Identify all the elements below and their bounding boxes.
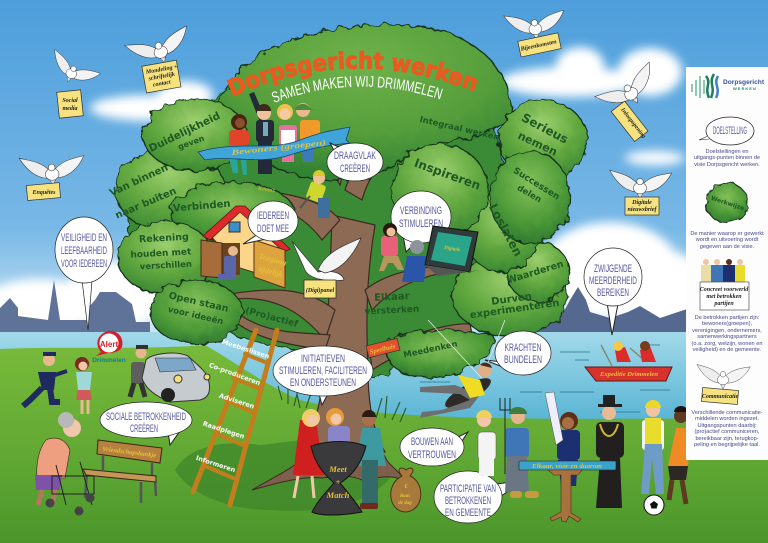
speech bubble: veiligheid: VEILIGHEID EN: [61, 232, 107, 244]
foliage: duidelijkheid: [143, 99, 247, 171]
dove: enquetes: [19, 153, 86, 200]
red boat with rowers: Expeditie Drimmelen: [599, 372, 659, 378]
foliage word labels: houden met: [130, 247, 192, 261]
logo: [692, 74, 765, 98]
mayor: [596, 395, 624, 508]
ladder labels: Raadplegen: [202, 420, 246, 441]
foliage word labels: Integraal werken: [419, 115, 500, 143]
title: Dorpsgericht werken: [226, 50, 477, 97]
foliage: meedenken: [385, 331, 493, 378]
foliage word labels: Elkaar: [374, 291, 410, 304]
kennis label on branch: Kennis: [257, 186, 276, 194]
foliage word labels: Van binnen: [108, 162, 170, 199]
foliage word labels: Verbinden: [173, 199, 231, 215]
grandmother with rollator: [35, 412, 94, 516]
meet and match funnel table: +: [336, 477, 341, 487]
foliage: rekening: [118, 222, 214, 294]
right village skyline: [535, 287, 690, 335]
speech bubble: krachten: KRACHTEN: [504, 342, 542, 354]
sign: speelhuis on branch: [366, 338, 400, 358]
speech bubble: draagvlak: DRAAGVLAK: [334, 150, 376, 162]
speech bubble: draagvlak: [327, 143, 383, 181]
stakeholders text: (o.a. zorg, welzijn, wonen en: [692, 341, 762, 347]
speech bubble: sociale: CREËREN: [130, 423, 158, 435]
speech bubble: verbinding: [391, 191, 451, 252]
dove: enquetes: Enquêtes: [31, 190, 56, 196]
foliage word labels: Loslaten: [486, 201, 525, 259]
alert sign: Drimmelen: [92, 357, 126, 364]
athlete with ball: [644, 406, 690, 515]
ladder labels: Adviseren: [218, 392, 256, 411]
woman on phone: [75, 357, 92, 414]
communicatie text: [691, 410, 763, 448]
trunk base and roots: [252, 448, 408, 490]
water ripples: [420, 345, 670, 412]
foliage: successen: [490, 151, 570, 243]
farmer: [500, 398, 539, 498]
girl on branch: [379, 223, 404, 271]
meet and match funnel table: Meet: [328, 464, 347, 474]
foliage word labels: Waarderen: [506, 259, 565, 286]
foliage word labels: Duidelijkheid: [147, 110, 222, 155]
speech bubble: initiatieven: STIMULEREN, FACILITEREN: [279, 365, 367, 377]
foliage word labels: Durven: [491, 291, 533, 308]
speech bubble: verbinding: STIMULEREN: [399, 218, 443, 230]
alert sign: [92, 331, 126, 364]
banner: bewoners (groepen): Bewoners (groepen): [230, 138, 327, 157]
foliage: open staan: [150, 280, 242, 344]
foliage: durven: [452, 256, 568, 336]
communicatie text: peling en begrijpelijke taal.: [694, 442, 760, 448]
speech bubble: bouwen: VERTROUWEN: [408, 449, 456, 461]
stakeholders text: bewoners(groepen),: [702, 321, 752, 327]
werkwijze text: [690, 231, 764, 250]
money bag: de dag: [398, 501, 412, 506]
foliage: main crown top: [212, 24, 512, 180]
dove: digitale nieuwsbrief: nieuwsbrief: [627, 207, 657, 213]
speech bubble: verbinding: VERBINDING: [400, 205, 442, 217]
dove: inloop sign: [595, 60, 665, 142]
foliage: van binnen: [115, 148, 225, 232]
foliage word labels: versterken: [364, 305, 420, 317]
communicatie text: Verschillende communicatie-: [691, 410, 763, 416]
speech bubble: participatie: BETROKKENEN: [445, 495, 491, 507]
doelstelling text: uitgangs-punten binnen de: [694, 155, 760, 161]
blue table banner: [519, 461, 616, 522]
burglar: [130, 345, 148, 397]
speech bubble: veiligheid: VOOR IEDEREEN: [61, 258, 107, 270]
woman in purple: [326, 408, 350, 446]
dove: mandeling contact: schriftelijk: [147, 72, 175, 82]
doelstelling text: [694, 149, 760, 168]
money bag: €: [404, 484, 408, 490]
woman in red: [293, 409, 324, 498]
sign: digi panel: [304, 280, 336, 298]
speech bubble: veiligheid: LEEFBAARHEID: [61, 245, 107, 257]
dove: mandeling contact: Mondeling +: [145, 64, 179, 76]
crown foliage: [115, 24, 587, 378]
foliage word labels: (Pro)actief: [244, 306, 299, 330]
werkwijze foliage icon: Werkwijze: [710, 195, 745, 212]
foliage: inspireren: [392, 144, 488, 236]
speech bubble: participatie: PARTICIPATIE VAN: [440, 483, 496, 495]
foliage: waarderen: [507, 242, 569, 302]
dove: digitale nieuwsbrief: [610, 170, 672, 215]
sign: speelhuis on branch: Speelhuis: [369, 343, 397, 356]
dove: digipanel: [292, 238, 361, 281]
red boat with rowers: [585, 341, 672, 381]
speech bubble: initiatieven: INITIATIEVEN: [301, 353, 345, 365]
tree shadow on grass: [175, 437, 395, 511]
communicatie text: (pro)actief communiceren,: [695, 429, 760, 435]
foliage: verbinden: [170, 182, 294, 242]
speech bubble: zwijgende: [584, 248, 642, 335]
speech bubble: sociale: [100, 402, 192, 445]
foliage word labels: Serieus: [519, 110, 571, 147]
speech bubble: bouwen: BOUWEN AAN: [411, 436, 453, 448]
speech bubble: draagvlak: CREËREN: [340, 163, 370, 175]
stakeholders box: [700, 282, 749, 310]
foliage word labels: verschillen: [140, 260, 192, 272]
stakeholders text: veiligheid) en de gemeente.: [693, 347, 762, 353]
werkwijze text: wordt en uitvoering wordt: [695, 237, 759, 243]
stakeholders box: met betrokken: [706, 294, 742, 300]
speech bubble: zwijgende: BEREIKEN: [597, 287, 629, 299]
speech bubble: zwijgende: MEERDERHEID: [589, 275, 637, 287]
water: [0, 332, 690, 432]
speech bubble: sociale: SOCIALE BETROKKENHEID: [106, 411, 186, 423]
werkwijze text: gegeven aan de visie.: [700, 244, 755, 250]
tree trunk and branches: [222, 130, 472, 452]
dove: social media: Social: [62, 98, 78, 104]
foliage: loslaten: [464, 192, 540, 272]
man with laptop: [402, 226, 480, 282]
ladder labels: Co-produceren: [208, 361, 262, 387]
foliage word labels: experimenteren: [469, 298, 560, 321]
sign: digi panel: (Digi)panel: [306, 287, 334, 294]
man in teal: [356, 410, 386, 509]
speech bubble: iedereen: IEDEREEN: [257, 210, 289, 222]
businesswoman with plans: [545, 392, 580, 486]
blue table banner: Elkaar, vóór en daarom: [531, 464, 602, 470]
doelstelling text: visie Dorpsgericht werken.: [694, 162, 760, 168]
communicatie dove: [697, 364, 750, 405]
communicatie text: Uitgangspunten daarbij:: [697, 423, 757, 429]
sawing man: [300, 170, 330, 218]
stakeholders box: Concreet voorwerld: [700, 287, 749, 293]
speech bubble: initiatieven: [273, 346, 373, 405]
foliage word labels: naar buiten: [114, 186, 178, 222]
foliage: serieus: [499, 100, 587, 180]
people group on branch: [228, 92, 320, 175]
bench: [83, 440, 162, 503]
dove: inloop sign: Inloopopening: [619, 106, 646, 140]
speech bubble: krachten: BUNDELEN: [504, 354, 542, 366]
ladder labels: [195, 338, 271, 474]
meet and match funnel table: [311, 442, 366, 515]
speech bubble: participatie: EN GEMEENTE: [445, 507, 491, 519]
dove: digitale nieuwsbrief: Digitale: [631, 200, 652, 206]
nurse: [476, 410, 496, 476]
foliage word labels: Meedenken: [403, 339, 459, 361]
doelstelling bubble: [699, 117, 754, 145]
speech bubble: zwijgende: ZWIJGENDE: [594, 263, 632, 275]
tree house: Toegang: [258, 252, 287, 268]
stakeholders icon: [701, 259, 745, 282]
stakeholders text: [692, 315, 762, 353]
stakeholders box: partijen: [713, 301, 734, 307]
foliage word labels: delen: [515, 183, 543, 205]
speech bubble: initiatieven: EN ONDERSTEUNEN: [290, 377, 356, 389]
legend sidebar: [686, 67, 768, 460]
money bag: [391, 468, 421, 512]
logo: Dorpsgericht: [723, 79, 765, 86]
money bag: Baas: [399, 494, 410, 499]
left village skyline: [0, 280, 150, 340]
alert sign: Alert: [100, 340, 118, 349]
foliage word labels: [108, 110, 571, 361]
doelstelling text: Doelstellingen en: [706, 149, 748, 155]
foliage word labels: voor ideeën: [167, 305, 224, 327]
speech bubble: iedereen: DOET MEE: [257, 223, 289, 235]
communicatie text: bereikbaar zijn, terugkop-: [695, 436, 759, 442]
dove: social media: media: [62, 106, 78, 112]
stakeholders text: verenigingen, ondernemers,: [692, 328, 762, 334]
man on tyre swing: [420, 320, 505, 418]
communicatie dove: Communicatie: [702, 394, 739, 400]
clouds: [0, 47, 710, 331]
tree house: tijdelijk: [257, 264, 284, 279]
bench: Vriendschapsbankje: [102, 446, 157, 459]
speech bubble: bouwen: [400, 428, 468, 466]
dove: social media: [45, 49, 102, 118]
foliage word labels: nemen: [516, 129, 559, 159]
werkwijze text: De manier waarop er gewerkt: [690, 231, 764, 237]
ladder labels: Meebeslissen: [221, 338, 271, 361]
foliage word labels: Inspireren: [412, 156, 482, 193]
stakeholders text: samenwerkingspartners: [697, 334, 757, 340]
dove: bijeenkomsten: Bijeenkomsten: [519, 39, 558, 53]
dove: bijeenkomsten: [504, 7, 567, 57]
speech bubble: veiligheid: [55, 217, 113, 330]
speech bubble: participatie: [434, 471, 525, 523]
reeds: [278, 386, 406, 422]
foliage word labels: Open staan: [168, 290, 230, 315]
stakeholders text: De betrokken partijen zijn:: [695, 315, 760, 321]
silver car: [142, 353, 210, 402]
dove: mandeling contact: [125, 23, 196, 93]
foliage word labels: geven: [177, 134, 206, 152]
tree house: [201, 206, 290, 288]
foliage word labels: Successen: [511, 166, 561, 203]
speech bubble: iedereen: [243, 201, 298, 244]
ladder labels: Informeren: [195, 454, 237, 474]
construction worker: [641, 400, 664, 494]
speech bubble: krachten: [485, 331, 551, 375]
man with laptop: Digitale: [443, 245, 461, 254]
subtitle: SAMEN MAKEN WIJ DRIMMELEN: [272, 76, 443, 102]
banner: bewoners (groepen): [198, 127, 350, 160]
foliage word labels: Rekening: [139, 232, 189, 245]
dove: mandeling contact: contact: [152, 79, 172, 89]
police officer: [23, 352, 67, 406]
grass: [0, 345, 768, 543]
ladder: [193, 330, 277, 505]
canopy base: [128, 55, 505, 378]
logo: WERKEN: [733, 86, 757, 91]
communicatie text: middelen worden ingezet.: [695, 416, 759, 422]
meet and match funnel table: Match: [326, 490, 350, 500]
werkwijze foliage icon: [706, 183, 748, 223]
